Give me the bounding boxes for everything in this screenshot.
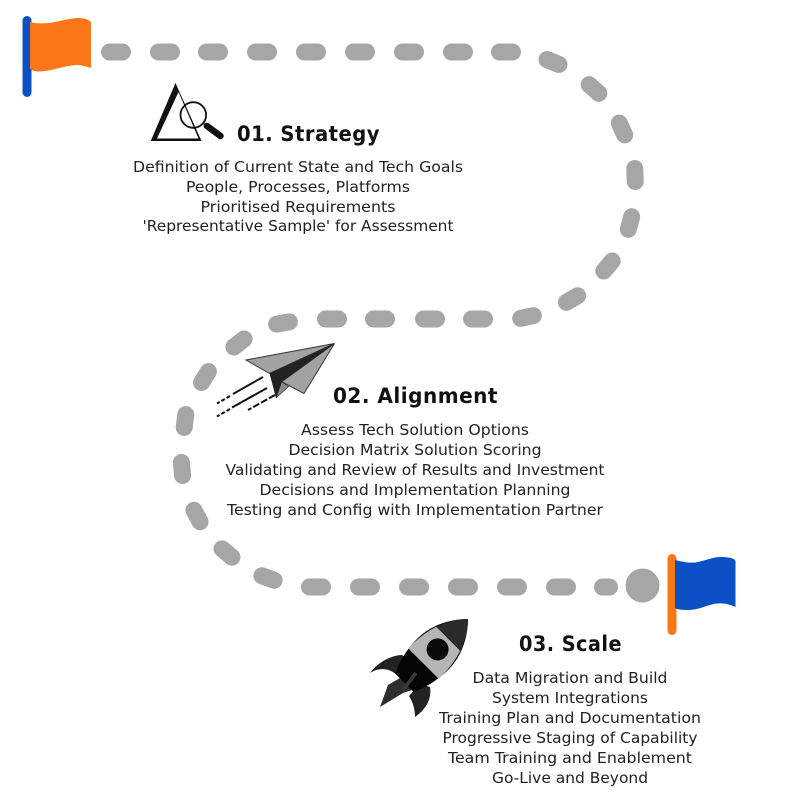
- heading: 01. Strategy: 01. Strategy: [237, 122, 380, 146]
- text block: scale items: Training Plan and Documentation: [438, 709, 701, 727]
- text block: strategy items: Definition of Current State and Tech Goals: [133, 158, 463, 176]
- icon: triangle and magnifier: [151, 83, 220, 141]
- text block: alignment items: Assess Tech Solution Options: [301, 421, 529, 439]
- text block: alignment items: Decision Matrix Solution Scoring: [288, 441, 542, 459]
- end flag: blue: [668, 554, 736, 635]
- heading: 03. Scale: 03. Scale: [519, 632, 622, 656]
- icon: rocket: [370, 603, 484, 717]
- text block: scale items: [438, 669, 701, 787]
- text block: alignment items: Decisions and Implementation Planning: [260, 481, 570, 499]
- heading: 02. Alignment: 02. Alignment: [333, 384, 498, 408]
- text block: strategy items: Prioritised Requirements: [200, 198, 396, 216]
- dashed route path: [101, 44, 660, 602]
- text block: strategy items: 'Representative Sample' for Assessment: [142, 217, 454, 235]
- start flag: orange: [22, 16, 91, 97]
- text block: strategy items: People, Processes, Platforms: [186, 178, 410, 196]
- text block: scale items: Go-Live and Beyond: [492, 769, 648, 787]
- text block: scale items: Data Migration and Build: [472, 669, 668, 687]
- text block: scale items: Team Training and Enablement: [447, 749, 692, 767]
- icon: paper plane: [217, 344, 334, 416]
- text block: alignment items: Testing and Config with Implementation Partner: [226, 501, 604, 519]
- text block: scale items: System Integrations: [492, 689, 648, 707]
- text block: alignment items: [226, 421, 605, 519]
- text block: alignment items: Validating and Review of Results and Investment: [226, 461, 605, 479]
- text block: scale items: Progressive Staging of Capability: [442, 729, 698, 747]
- text block: strategy items: [133, 158, 463, 235]
